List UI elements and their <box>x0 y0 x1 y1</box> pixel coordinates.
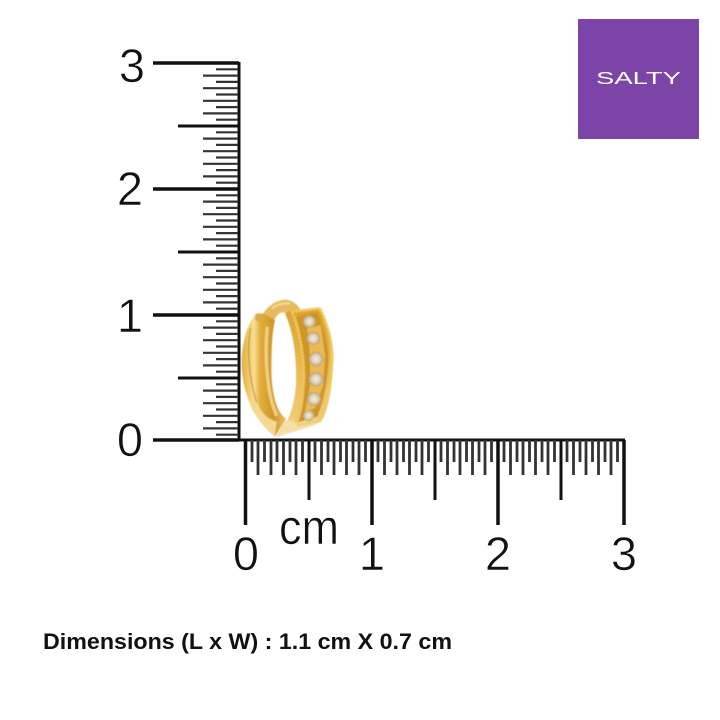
front panel bottom facet <box>276 418 315 437</box>
vertical ruler <box>153 62 239 441</box>
vertical ruler labels: 3 <box>119 39 145 92</box>
horizontal ruler labels: 0 <box>233 527 259 580</box>
vertical ruler labels: 0 <box>117 413 143 466</box>
horizontal ruler labels: 1 <box>359 527 385 580</box>
vertical ruler labels: 2 <box>117 162 143 215</box>
top hinge arc <box>263 300 301 322</box>
horizontal ruler labels: 2 <box>485 527 511 580</box>
horizontal ruler labels <box>233 527 637 580</box>
hoop band <box>242 313 286 437</box>
vertical ruler labels: 1 <box>117 289 143 342</box>
horizontal ruler labels: 3 <box>611 527 637 580</box>
front panel <box>277 308 333 437</box>
dimensions caption: Dimensions (L x W) : 1.1 cm X 0.7 cm <box>43 629 452 654</box>
brand logo: SALTY <box>596 68 682 88</box>
front panel openwork <box>297 312 328 422</box>
front panel beaded edges <box>293 308 332 425</box>
vertical ruler labels <box>117 39 145 466</box>
earring photo illustration <box>242 300 333 437</box>
horizontal ruler <box>239 440 625 525</box>
band bottom facet <box>250 402 277 437</box>
unit label cm: cm <box>279 501 339 555</box>
brand logo <box>578 19 699 139</box>
crystal stones <box>303 315 323 421</box>
